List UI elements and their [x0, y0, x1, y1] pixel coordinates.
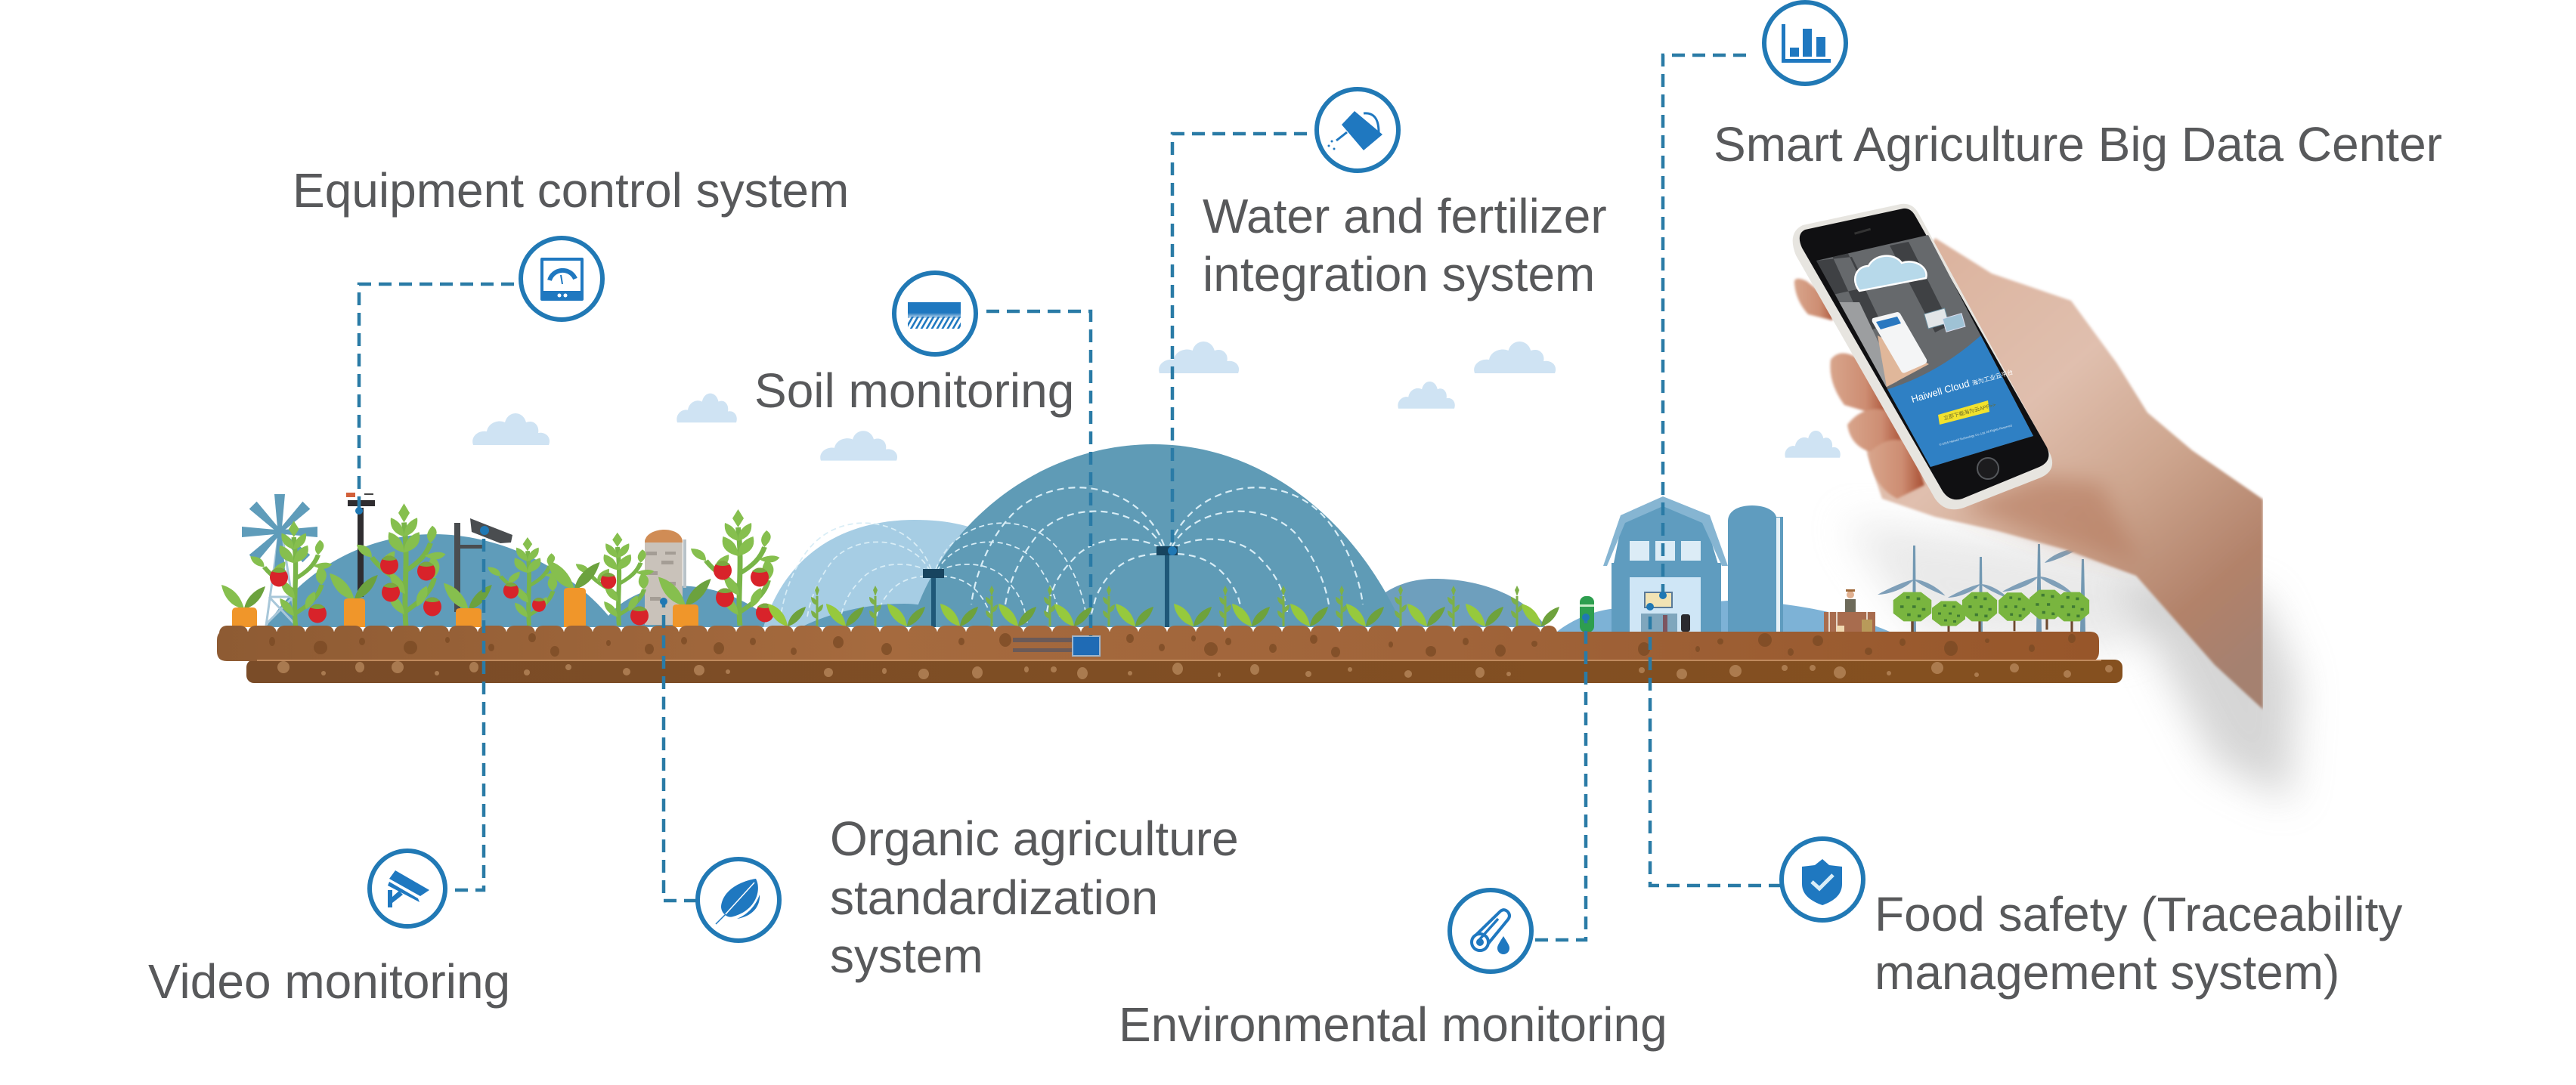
connector: organic agriculture [664, 602, 697, 901]
connector end dots [355, 507, 1667, 621]
label: food safety: management system) [1875, 945, 2339, 1000]
wind turbines [1878, 544, 2085, 632]
tablets [1924, 308, 1949, 329]
copyright text: © 2015 Haiwell Technology Co.,Ltd. All Rights Reserved [1939, 423, 2012, 447]
fingers behind the phone [1794, 279, 1924, 499]
farmer and fence [1824, 589, 1875, 632]
row of sprouts [768, 586, 1559, 626]
label: organic agriculture: standardization [830, 870, 1158, 925]
shadow under the hand [1844, 521, 2298, 801]
icon: bar chart [1764, 2, 1846, 84]
label: big data center: Smart Agriculture Big Data Center [1714, 117, 2442, 172]
icon: thermometer [1450, 890, 1531, 972]
connector: water and fertilizer [1172, 134, 1307, 552]
speaker [1854, 228, 1871, 235]
hand [1867, 238, 2263, 709]
label: video monitoring: Video monitoring [148, 954, 510, 1009]
label: organic agriculture: Organic agriculture [830, 811, 1239, 866]
farm landscape [217, 444, 2122, 683]
background clouds [472, 342, 1841, 461]
cloud on screen [1855, 256, 1927, 291]
label: food safety: Food safety (Traceability [1875, 887, 2402, 941]
app title: Haiwell Cloud 海为工业云平台 [1910, 365, 2014, 405]
hills [266, 444, 1890, 632]
miniature hand and phone [1878, 335, 1929, 387]
phone body [1793, 204, 2052, 509]
label: environmental monitoring: Environmental monitoring [1119, 997, 1667, 1052]
grain silo [1728, 505, 1783, 632]
buried blue soil sensor [1013, 636, 1100, 656]
phone screen [1816, 235, 2033, 467]
icon: watering can [1317, 89, 1398, 171]
soil layers [217, 632, 2122, 683]
connector: equipment control [359, 284, 514, 512]
icon: equipment gauge [521, 238, 602, 320]
home button [1977, 458, 1999, 479]
label: water and fertilizer: Water and fertilizer [1203, 189, 1607, 243]
connector: environmental monitoring [1535, 617, 1586, 940]
connector: soil monitoring [986, 311, 1091, 636]
label: organic agriculture: system [830, 929, 983, 983]
tomato plants [250, 503, 780, 626]
icon: camera [370, 851, 445, 926]
sprinkler posts [923, 546, 1178, 627]
windmill [242, 494, 317, 626]
icon: shield [1782, 839, 1863, 920]
download button: 立即下载海为云APP>> [1943, 401, 1996, 422]
hand holding smartphone [1793, 204, 2263, 709]
sprinkler spray arcs [781, 487, 1363, 624]
icon: leaf [698, 859, 779, 941]
green soil sensor [1580, 596, 1594, 632]
carrots [221, 561, 711, 627]
phone bezel [1800, 209, 2048, 499]
connector: food safety [1650, 616, 1782, 886]
barn [1603, 496, 1728, 632]
surveillance camera pole [454, 518, 512, 612]
connector: big data center [1663, 55, 1746, 597]
icon: soil [894, 273, 976, 354]
orchard trees [1893, 590, 2089, 635]
weather station pole [346, 493, 375, 597]
brick silo [645, 530, 686, 625]
connector: video monitoring [455, 530, 484, 890]
label: water and fertilizer: integration system [1203, 247, 1595, 301]
label: soil monitoring: Soil monitoring [754, 363, 1074, 418]
label: equipment control system: Equipment control system [293, 163, 849, 218]
